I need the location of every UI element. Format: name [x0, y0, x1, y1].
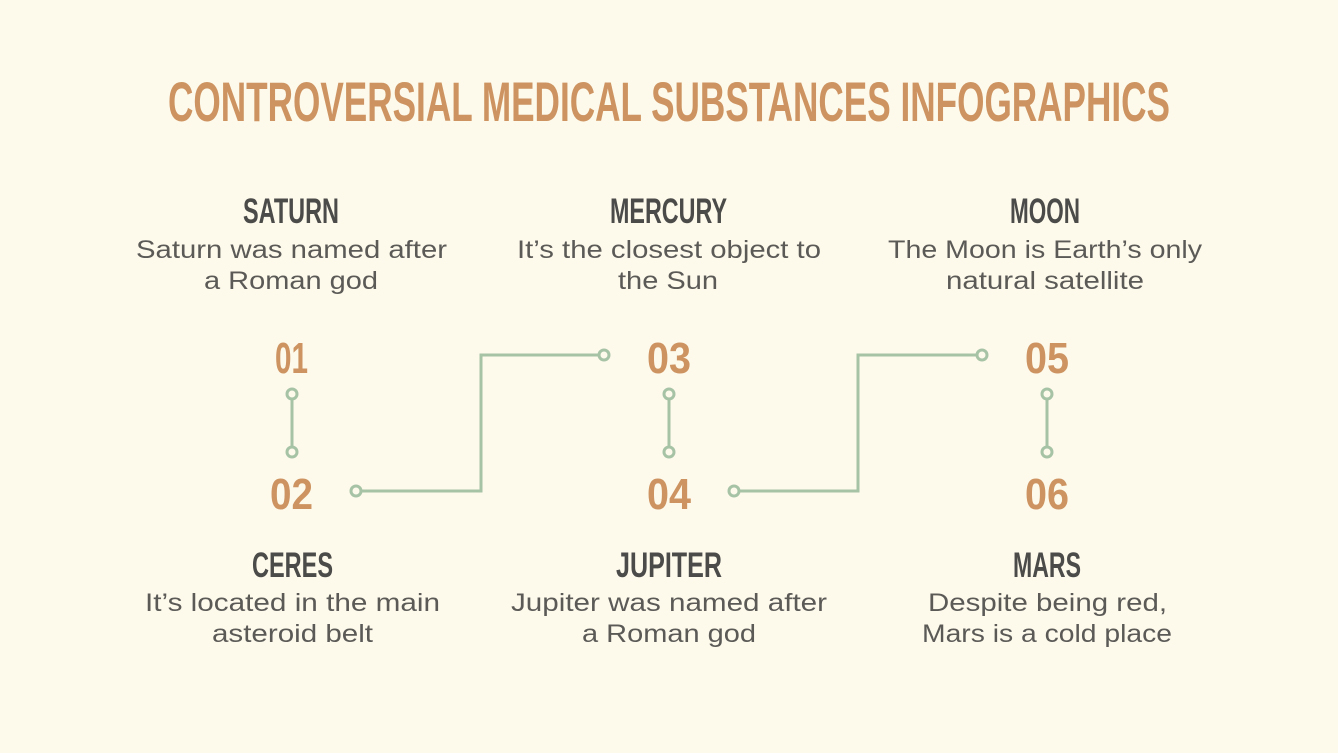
connectors: [287, 350, 1052, 496]
item: mercury: MERCURY: [610, 192, 727, 231]
item: mercury: the Sun: [618, 267, 718, 295]
item: mars: Mars is a cold place: [922, 620, 1172, 648]
item: mercury: [517, 192, 821, 295]
numbers: [270, 334, 1069, 519]
item: saturn: a Roman god: [204, 267, 378, 295]
item: jupiter: [511, 546, 827, 648]
numbers: 06: [1025, 470, 1069, 519]
item: ceres: [145, 546, 440, 648]
numbers: 04: [647, 470, 691, 519]
item: jupiter: JUPITER: [616, 546, 722, 585]
item: mercury: It’s the closest object to: [517, 236, 821, 264]
numbers: 02: [270, 470, 313, 519]
item: mars: Despite being red,: [928, 589, 1167, 617]
item: ceres: It’s located in the main: [145, 589, 440, 617]
item: moon: MOON: [1010, 192, 1080, 231]
item: jupiter: Jupiter was named after: [511, 589, 827, 617]
item: saturn: Saturn was named after: [136, 236, 447, 264]
item: mars: [922, 546, 1172, 648]
item: moon: [888, 192, 1203, 295]
item: saturn: SATURN: [243, 192, 339, 231]
numbers: 05: [1025, 334, 1069, 383]
numbers: 01: [275, 334, 308, 383]
item: moon: The Moon is Earth’s only: [888, 236, 1203, 264]
item: moon: natural satellite: [946, 267, 1144, 295]
item: jupiter: a Roman god: [582, 620, 756, 648]
numbers: 03: [647, 334, 691, 383]
item: saturn: [136, 192, 447, 295]
item: ceres: asteroid belt: [212, 620, 373, 648]
item: ceres: CERES: [252, 546, 333, 585]
item: mars: MARS: [1013, 546, 1081, 585]
